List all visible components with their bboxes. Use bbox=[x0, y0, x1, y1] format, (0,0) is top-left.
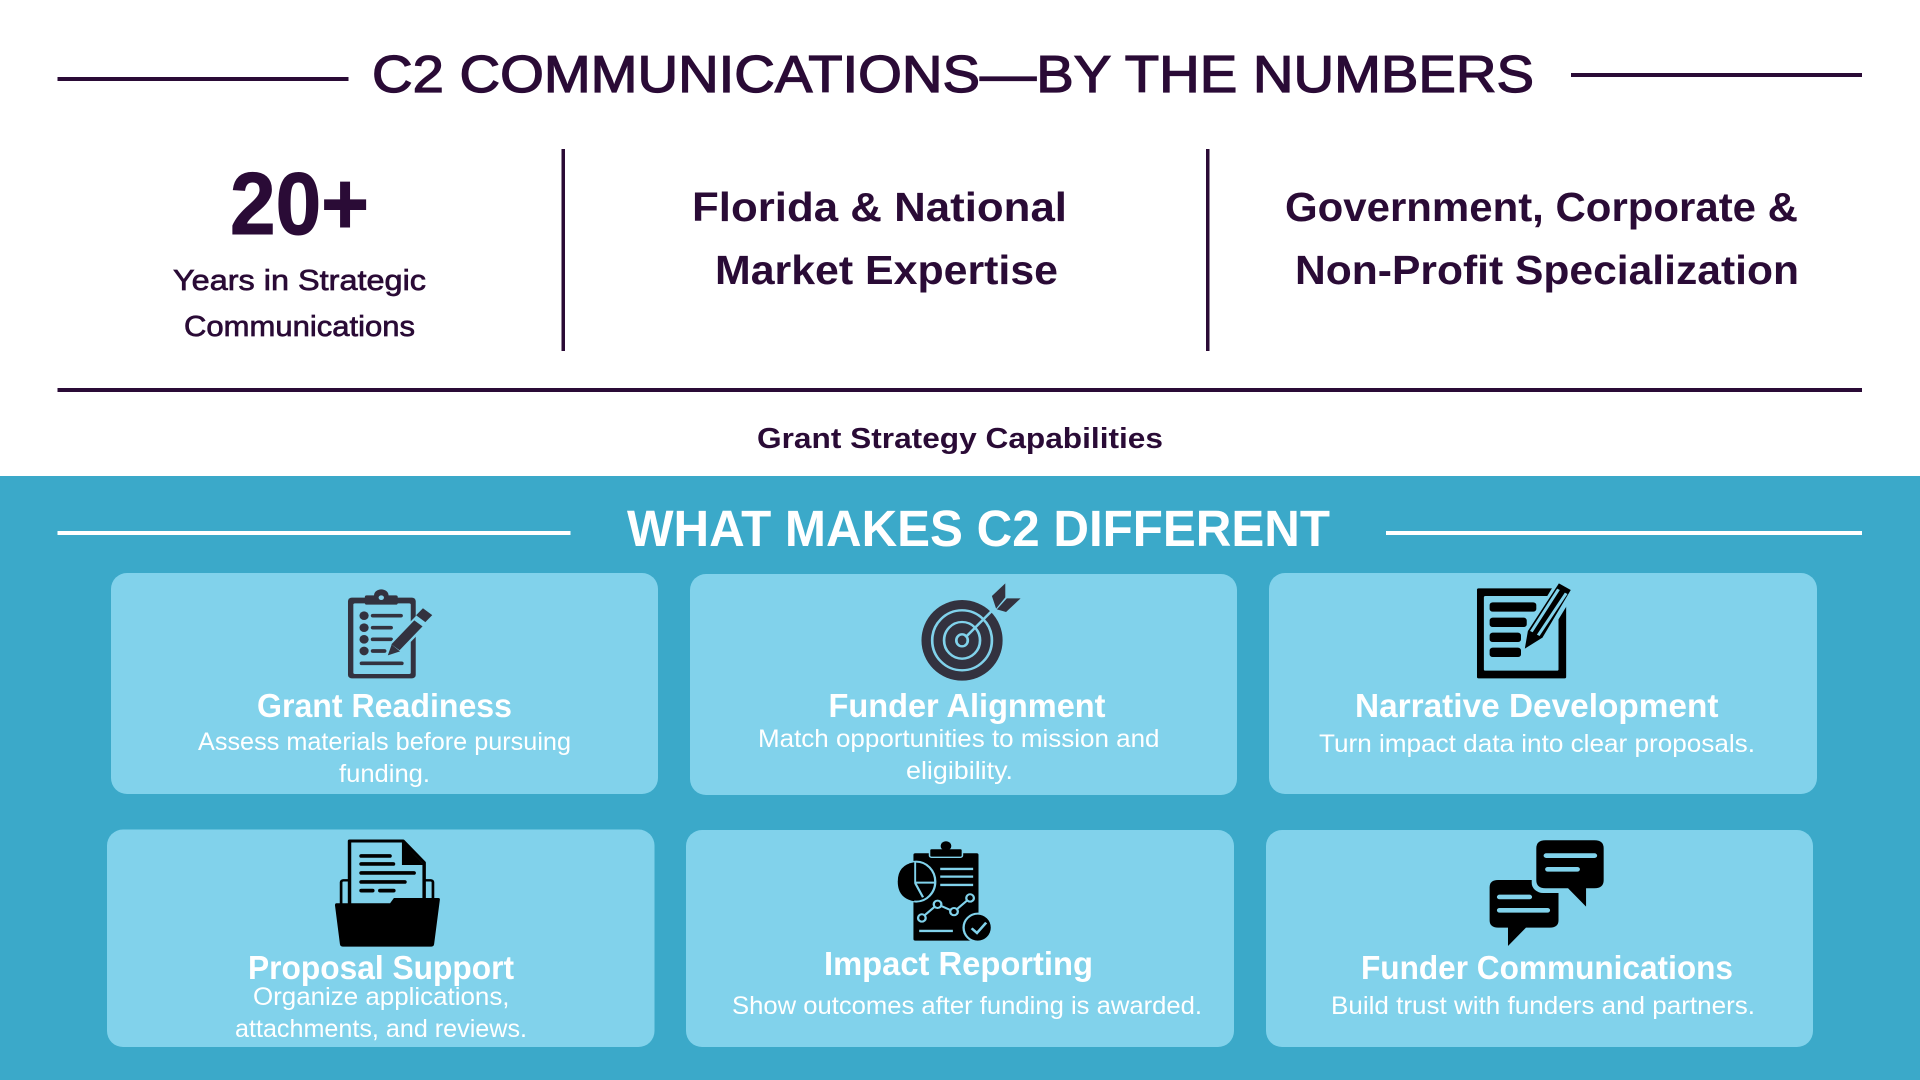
stat: market expertise bbox=[692, 184, 1067, 293]
card text: Organize applications, bbox=[253, 983, 510, 1011]
stat: specialization: Government, Corporate & bbox=[1285, 184, 1798, 230]
card title: Narrative Development bbox=[1355, 687, 1718, 724]
panel: narrative development bbox=[1269, 573, 1817, 794]
teal section background bbox=[0, 476, 1920, 1080]
icon: document with pen bbox=[1477, 583, 1576, 678]
card title: Impact Reporting bbox=[824, 945, 1093, 982]
stat: specialization bbox=[1285, 184, 1799, 293]
stat: specialization: Non-Profit Specialization bbox=[1295, 247, 1799, 293]
stat: 20+ years: Communications bbox=[184, 311, 415, 343]
panel: impact reporting bbox=[686, 830, 1234, 1047]
card text: Build trust with funders and partners. bbox=[1331, 992, 1755, 1020]
divider right bbox=[1206, 149, 1210, 351]
card text: Turn impact data into clear proposals. bbox=[1319, 730, 1755, 758]
card title: Proposal Support bbox=[248, 949, 514, 986]
card text bbox=[758, 725, 1160, 785]
stat: market expertise: Market Expertise bbox=[715, 247, 1058, 293]
card text: Assess materials before pursuing bbox=[198, 728, 571, 756]
stat: 20+ years bbox=[173, 154, 426, 343]
card text: Match opportunities to mission and bbox=[758, 725, 1160, 753]
icon: clipboard checklist with pencil bbox=[348, 589, 428, 678]
card text: Show outcomes after funding is awarded. bbox=[732, 992, 1202, 1020]
stat: market expertise: Florida & National bbox=[692, 184, 1067, 230]
panel: grant readiness bbox=[111, 573, 658, 794]
panel: proposal support bbox=[107, 830, 654, 1047]
stat: 20+ years: 20+ bbox=[230, 154, 369, 253]
card text bbox=[235, 983, 527, 1043]
section heading: WHAT MAKES C2 DIFFERENT bbox=[627, 500, 1330, 557]
card text: attachments, and reviews. bbox=[235, 1015, 527, 1043]
panel: funder communications bbox=[1266, 830, 1813, 1047]
card title: Grant Readiness bbox=[257, 687, 512, 724]
icon: folder with document bbox=[335, 841, 440, 947]
section heading bbox=[58, 500, 1862, 557]
card title: Funder Communications bbox=[1361, 949, 1733, 986]
icon: report clipboard with chart bbox=[897, 841, 992, 942]
title bbox=[58, 46, 1862, 104]
divider left bbox=[562, 149, 565, 351]
subheading: grant strategy capabilities: Grant Strategy Capabilities bbox=[757, 423, 1163, 455]
horizontal rule bbox=[58, 388, 1862, 392]
card text: eligibility. bbox=[906, 757, 1013, 785]
card title: Funder Alignment bbox=[828, 687, 1106, 724]
icon: target with arrow bbox=[921, 583, 1021, 681]
title: C2 COMMUNICATIONS—BY THE NUMBERS bbox=[372, 46, 1534, 104]
icon: speech bubbles bbox=[1490, 836, 1608, 946]
panel: funder alignment bbox=[690, 574, 1237, 795]
card text: funding. bbox=[339, 760, 430, 788]
card text bbox=[198, 728, 571, 788]
stat: 20+ years: Years in Strategic bbox=[173, 265, 426, 297]
